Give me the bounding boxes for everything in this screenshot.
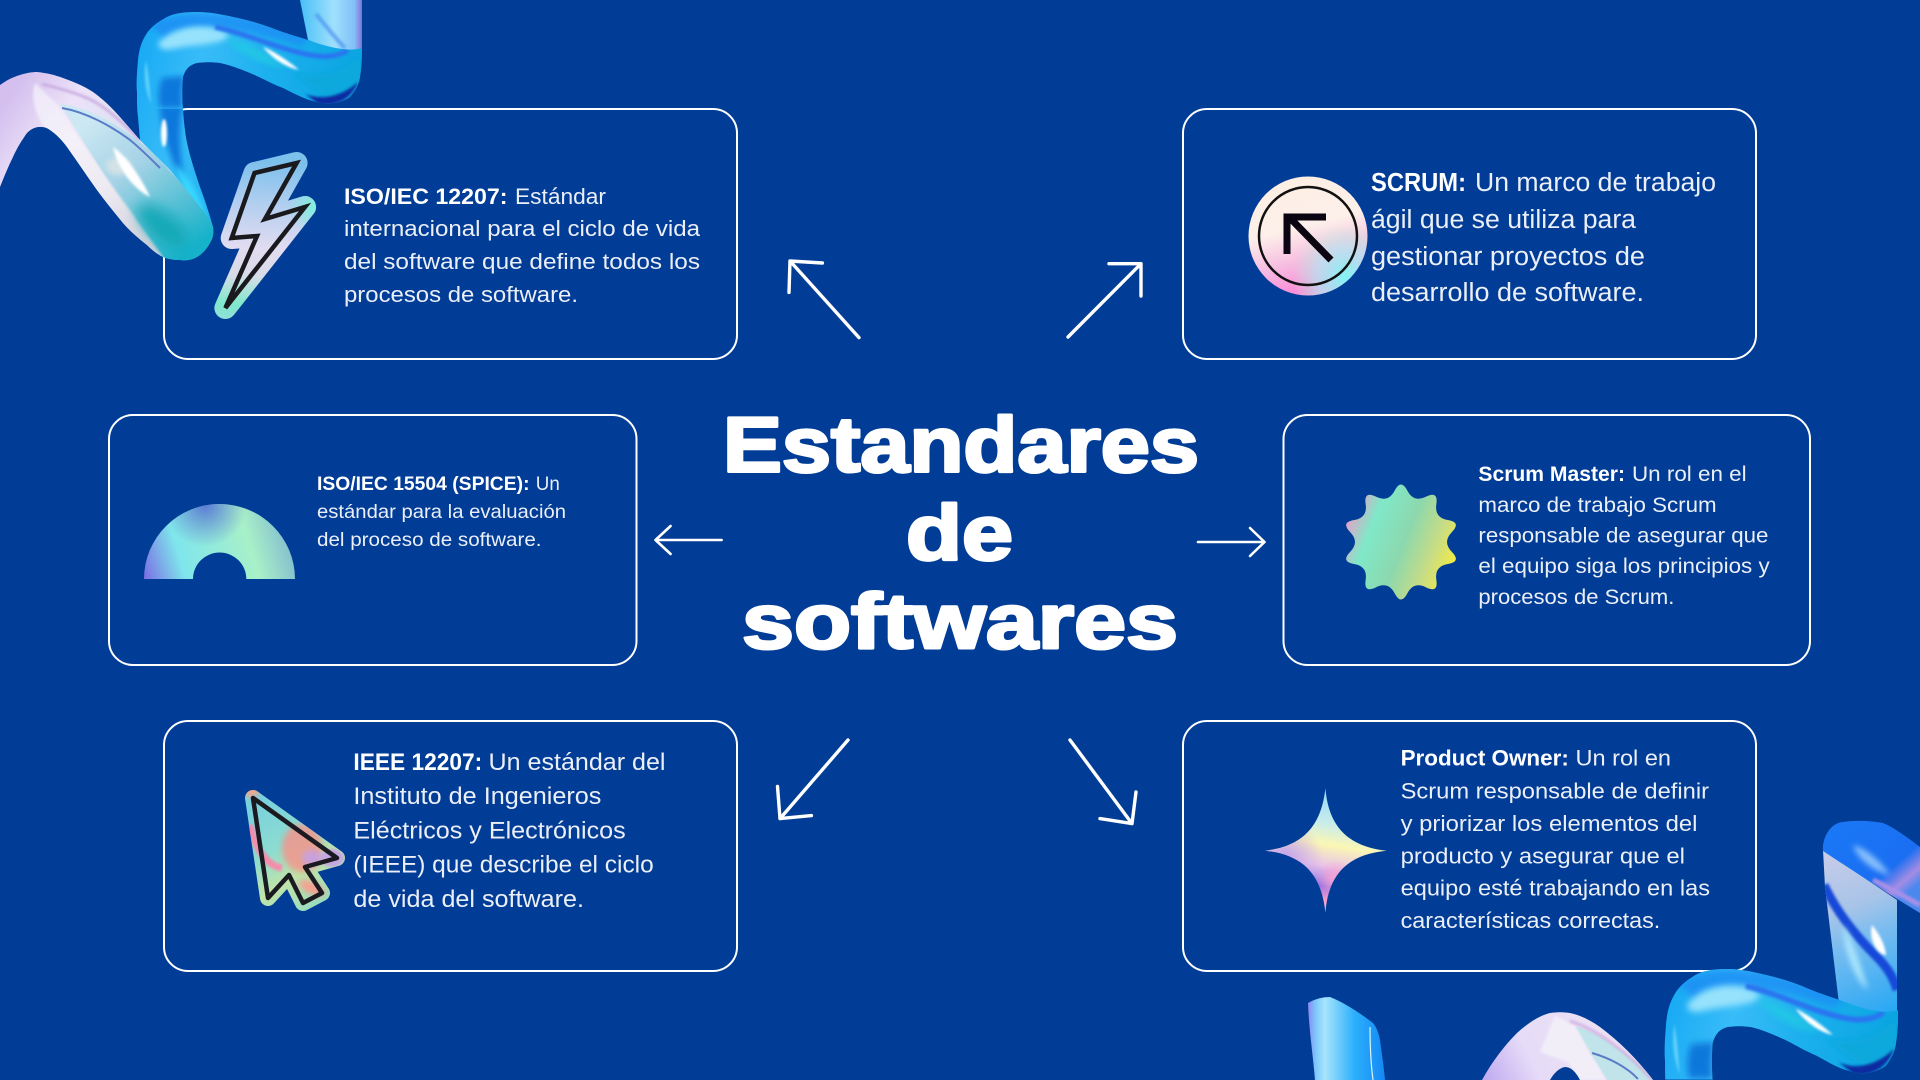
panel text: Scrum Master:: [1478, 462, 1625, 486]
icon: holographic lightning bolt: [225, 163, 340, 308]
panel text: Instituto de Ingenieros: [353, 783, 601, 810]
main cyan loop: [1647, 955, 1906, 1080]
arrow: up-left: [789, 261, 859, 338]
panel text: IEEE 12207:: [353, 749, 482, 776]
panel outline: [109, 415, 636, 665]
panel text: ISO/IEC 12207:: [344, 184, 508, 209]
panel: SCRUM: [1183, 109, 1756, 359]
panel: ISO/IEC 12207: [164, 109, 737, 359]
panel text: Un marco de trabajo: [1475, 169, 1716, 197]
panel text: procesos de Scrum.: [1478, 585, 1674, 609]
panel text: Product Owner:: [1401, 745, 1569, 770]
panel text: Un rol en el: [1632, 462, 1747, 486]
arrow: down-left: [778, 740, 848, 819]
title: [723, 400, 1199, 665]
arrow: down-right: [1070, 740, 1136, 824]
panel text: [1478, 462, 1770, 609]
panel: Product Owner: [1183, 721, 1756, 971]
panel text: marco de trabajo Scrum: [1478, 493, 1717, 517]
panel text: el equipo siga los principios y: [1478, 554, 1770, 578]
icon: gradient half ring: [144, 504, 295, 579]
panel text: producto y asegurar que el: [1401, 844, 1685, 869]
icon: holographic cursor: [240, 783, 344, 903]
icon: gradient sparkle: [1265, 788, 1387, 913]
panel outline: [164, 109, 737, 359]
panel text: ISO/IEC 15504 (SPICE):: [317, 473, 530, 495]
panel text: [353, 749, 666, 913]
panel outline: [1183, 721, 1756, 971]
panel text: características correctas.: [1401, 908, 1660, 933]
panel text: equipo esté trabajando en las: [1401, 876, 1710, 900]
decorative 3D ribbon: bottom right: [1308, 815, 1920, 1080]
panel: ISO/IEC 15504 SPICE: [109, 415, 636, 665]
panel text: gestionar proyectos de: [1371, 243, 1645, 271]
panel text: desarrollo de software.: [1371, 279, 1644, 307]
panel: IEEE 12207: [164, 721, 737, 971]
panel text: del proceso de software.: [317, 529, 542, 551]
panel text: estándar para la evaluación: [317, 501, 566, 523]
panel text: Scrum responsable de definir: [1401, 778, 1709, 803]
white ribbon segment: [1482, 1012, 1653, 1080]
glass stem: [1823, 851, 1897, 1012]
arrow: left: [656, 526, 722, 554]
title: de: [906, 488, 1013, 576]
panel text: Eléctricos y Electrónicos: [353, 817, 626, 844]
title: Estandares: [723, 400, 1199, 488]
panel text: internacional para el ciclo de vida: [344, 216, 701, 241]
blue cap: [1822, 820, 1920, 913]
panel text: responsable de asegurar que: [1478, 523, 1768, 547]
panel text: (IEEE) que describe el ciclo: [353, 852, 654, 879]
panel text: [317, 473, 566, 551]
panel text: Un rol en: [1576, 745, 1671, 770]
panel text: SCRUM:: [1371, 169, 1466, 197]
decorative 3D ribbon: top left: [0, 0, 370, 270]
panel text: [1401, 745, 1710, 933]
icon: arrow in holographic circle: [1248, 176, 1368, 296]
panel text: [1371, 169, 1716, 307]
panel outline: [164, 721, 737, 971]
arrow: right: [1198, 528, 1264, 556]
panel text: [344, 184, 701, 307]
panel text: Un estándar del: [488, 749, 666, 776]
title: softwares: [742, 577, 1178, 665]
arrow: up-right: [1068, 264, 1141, 337]
panel text: Un: [536, 473, 560, 495]
icon: gradient badge: [1346, 484, 1456, 600]
panel outline: [1284, 415, 1810, 665]
panel text: ágil que se utiliza para: [1371, 206, 1637, 234]
panel text: procesos de software.: [344, 282, 578, 307]
panel text: del software que define todos los: [344, 249, 700, 274]
panel outline: [1183, 109, 1756, 359]
panel text: y priorizar los elementos del: [1401, 811, 1697, 836]
small blue ribbon segment: [1308, 997, 1385, 1080]
panel: Scrum Master: [1284, 415, 1810, 665]
panel text: Estándar: [515, 184, 607, 209]
panel text: de vida del software.: [353, 886, 584, 913]
